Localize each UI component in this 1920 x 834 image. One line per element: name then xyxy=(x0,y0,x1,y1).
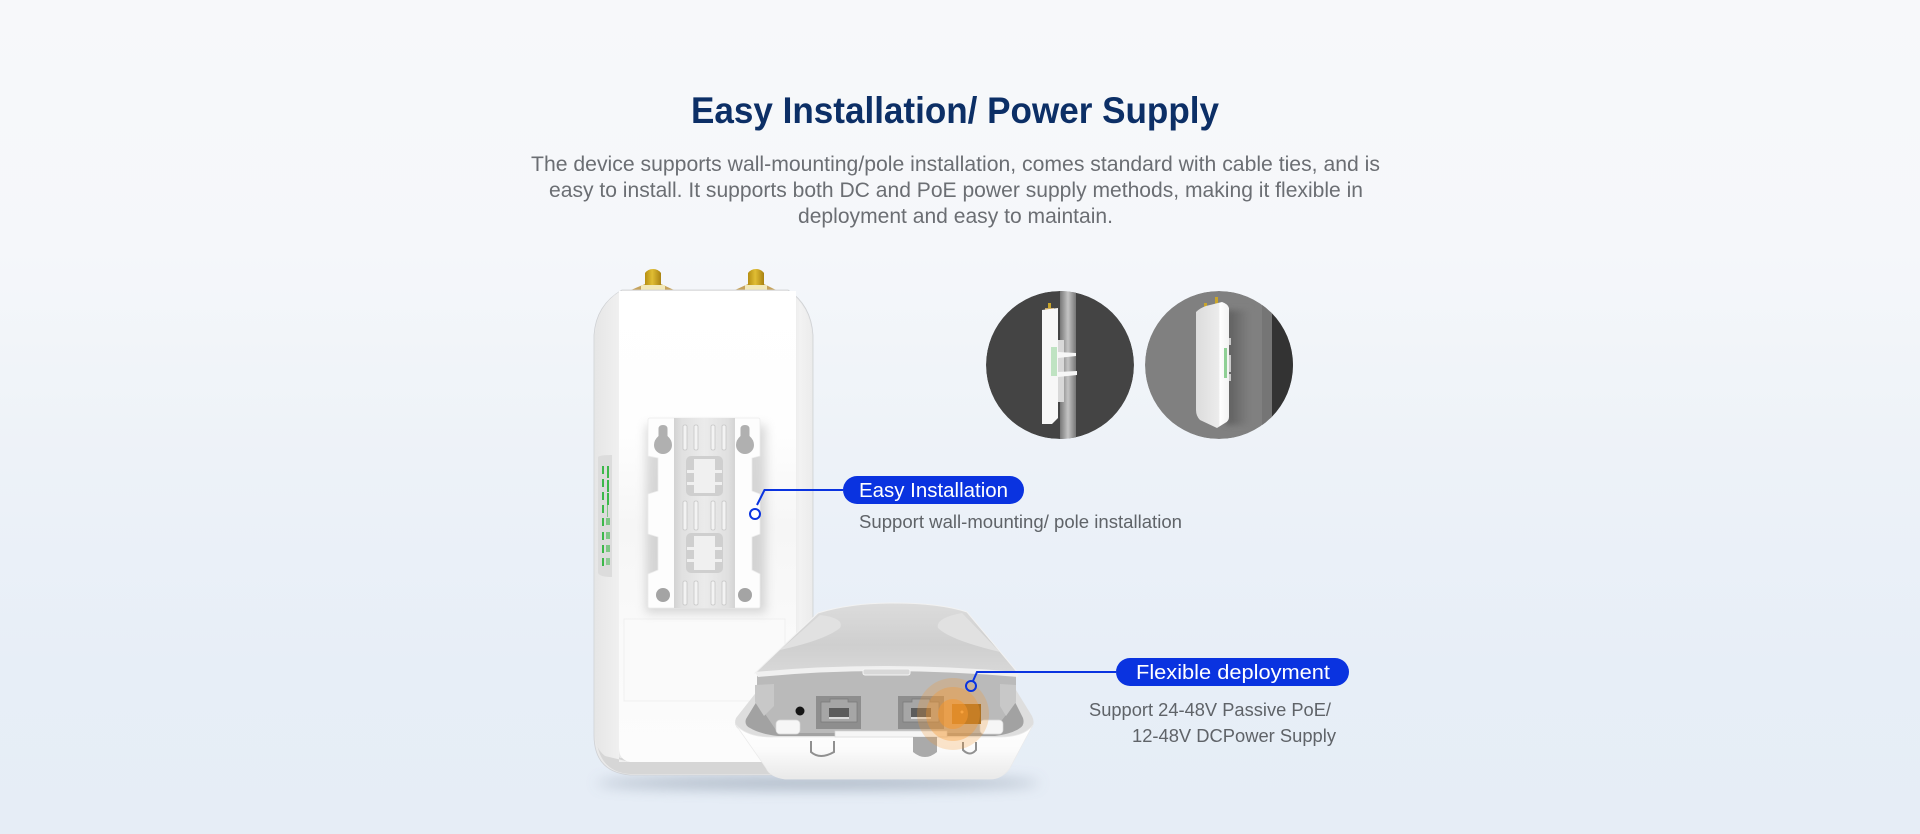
LEDs xyxy=(1224,348,1227,378)
pole mount photo xyxy=(986,291,1134,439)
mounting hole left xyxy=(656,588,670,602)
leader line xyxy=(757,490,843,505)
pill xyxy=(843,476,1024,504)
intro paragraph xyxy=(531,153,1380,228)
notch xyxy=(913,737,937,757)
orange glow xyxy=(917,678,989,750)
bottom edge xyxy=(596,735,812,774)
device xyxy=(1042,308,1058,424)
description xyxy=(1089,700,1336,746)
intro paragraph: deployment and easy to maintain. xyxy=(798,205,1113,228)
keyhole right xyxy=(736,425,754,454)
callout: flexible deployment xyxy=(966,658,1349,746)
white hinge tabs xyxy=(776,720,1003,737)
pill label: Flexible deployment xyxy=(1136,662,1330,684)
description: Support wall-mounting/ pole installation xyxy=(859,512,1182,532)
lid xyxy=(755,603,1018,673)
LED panel xyxy=(598,455,612,577)
pill label: Easy Installation xyxy=(859,480,1008,502)
left side panel xyxy=(595,292,630,762)
reset button xyxy=(796,706,804,716)
tray body xyxy=(736,725,1033,779)
marker xyxy=(750,509,760,519)
cavity wall xyxy=(757,669,1016,733)
LEDs xyxy=(1051,347,1057,376)
wall shadow xyxy=(1225,308,1244,426)
title: Easy Installation/ Power Supply xyxy=(691,90,1219,131)
ethernet port right xyxy=(898,696,944,729)
wall mount photo xyxy=(1145,291,1293,439)
wall edge xyxy=(1272,314,1293,416)
right side panel xyxy=(788,291,812,762)
lid rim xyxy=(755,666,1018,677)
DC power port xyxy=(952,704,981,724)
antennas xyxy=(1215,297,1218,304)
pole xyxy=(1060,291,1076,439)
bowl inner xyxy=(746,696,1024,736)
bracket windows xyxy=(686,456,723,573)
lid latch xyxy=(863,669,910,675)
right clip xyxy=(1000,684,1016,716)
bracket ridges xyxy=(683,425,726,605)
pill xyxy=(1116,658,1349,686)
callout: easy installation xyxy=(750,476,1182,532)
mounting hole right xyxy=(738,588,752,602)
loop right xyxy=(963,742,976,754)
rear device unit xyxy=(594,269,813,775)
mounting bracket shadow xyxy=(646,425,766,613)
leader line xyxy=(973,672,1116,681)
intro paragraph: easy to install. It supports both DC and PoE power supply methods, making it flexible in xyxy=(549,179,1363,202)
ethernet port left xyxy=(816,696,861,729)
wall strip xyxy=(1262,305,1272,425)
lid highlights xyxy=(780,615,841,650)
marker xyxy=(966,681,976,691)
device xyxy=(1196,302,1229,428)
device body xyxy=(594,290,813,775)
brackets xyxy=(1229,338,1231,381)
cable ties xyxy=(1058,352,1077,377)
intro paragraph: The device supports wall-mounting/pole installation, comes standard with cable ties, and is xyxy=(531,153,1380,176)
icon: antenna left xyxy=(631,269,674,290)
loop left xyxy=(811,741,834,756)
left clip xyxy=(755,684,774,716)
antenna xyxy=(1048,303,1051,308)
front open device unit xyxy=(735,603,1034,779)
ground shadow xyxy=(596,777,1040,789)
bracket xyxy=(1058,340,1064,402)
label area xyxy=(624,619,785,701)
mounting bracket xyxy=(648,418,760,608)
description: Support 24-48V Passive PoE/ xyxy=(1089,700,1331,720)
keyhole left xyxy=(654,425,672,454)
icon: antenna right xyxy=(735,269,776,290)
bowl rim xyxy=(735,690,1034,740)
description: 12-48V DCPower Supply xyxy=(1132,726,1336,746)
front face xyxy=(619,291,796,762)
